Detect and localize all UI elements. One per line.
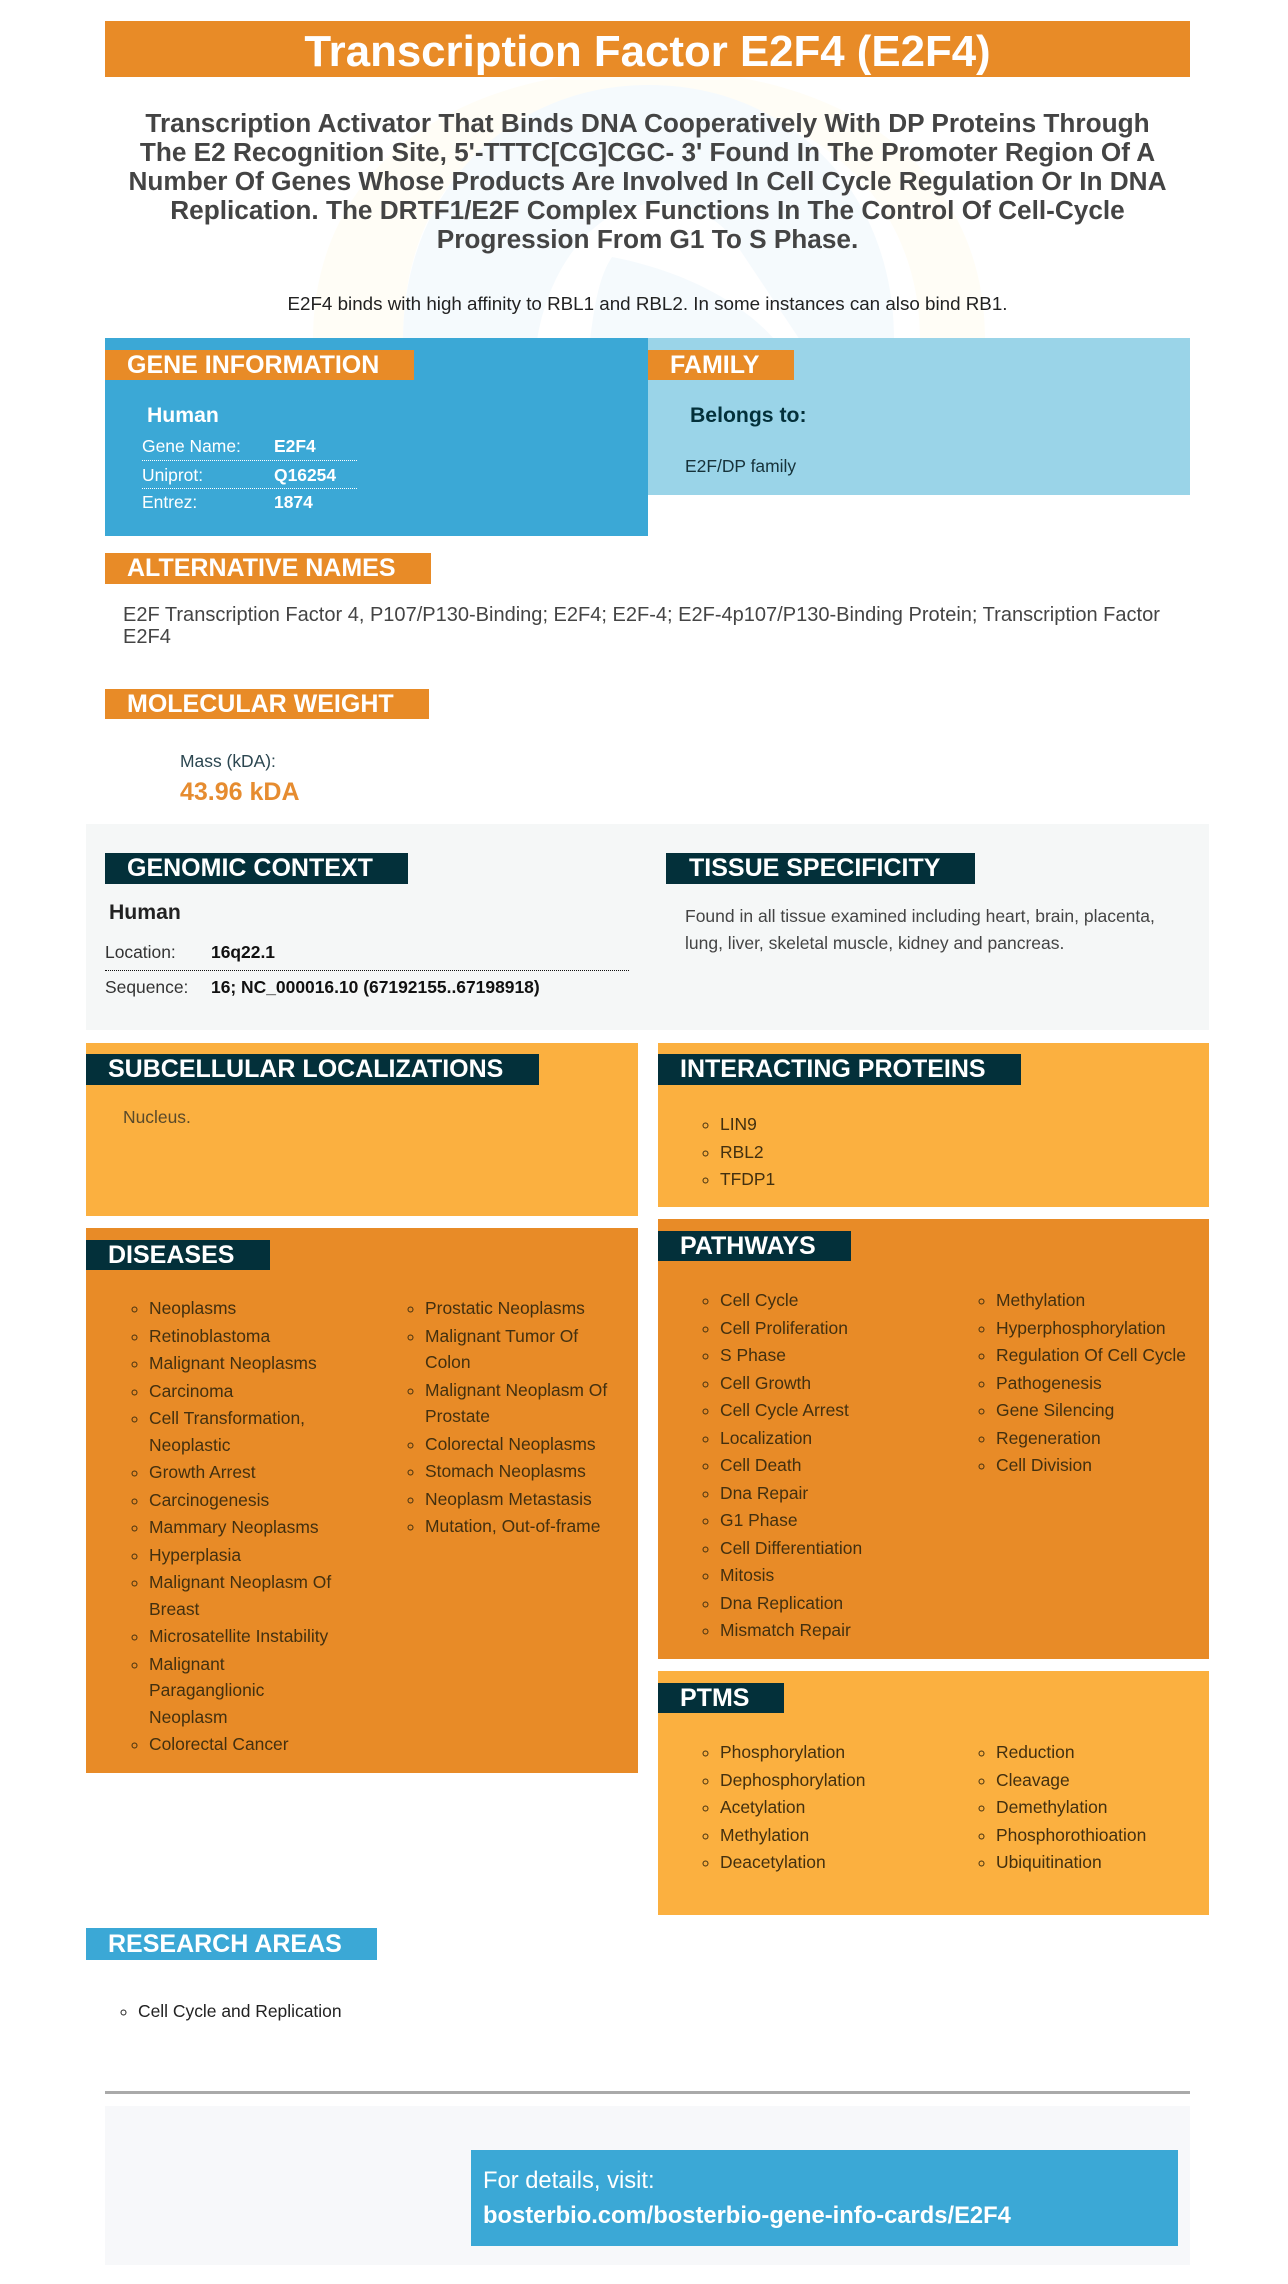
pathways list column 1: Cell Differentiation — [720, 1538, 862, 1558]
heading: diseases — [86, 1240, 270, 1270]
uniprot row — [142, 464, 357, 489]
tissue specificity text: lung, liver, skeletal muscle, kidney and pancreas. — [685, 933, 1064, 953]
species: human: Human — [109, 901, 181, 924]
panel: pathways — [658, 1219, 1209, 1659]
PTMs list column 1 — [702, 1742, 865, 1872]
pathways list column 1: Cell Growth — [720, 1372, 811, 1392]
pathways list column 2: Gene Silencing — [996, 1400, 1114, 1420]
pathways list column 1: Mitosis — [720, 1565, 774, 1585]
heading: family — [648, 350, 794, 380]
panel: gene information — [105, 338, 648, 536]
diseases list column 1: Malignant Neoplasms — [149, 1353, 317, 1373]
pathways list column 2: Regulation Of Cell Cycle — [996, 1345, 1186, 1365]
subtitle description: Replication. The DRTF1/E2F Complex Functions In The Control Of Cell-Cycle — [170, 195, 1125, 225]
diseases list column 2: Colorectal Neoplasms — [425, 1434, 596, 1454]
heading: research areas: RESEARCH AREAS — [108, 1930, 342, 1958]
diseases list column 2: Prostatic Neoplasms — [425, 1298, 585, 1318]
diseases list column 1: Colorectal Cancer — [149, 1734, 289, 1754]
PTMs list column 2 — [978, 1742, 1146, 1872]
callout: details link — [471, 2150, 1178, 2246]
heading: diseases: DISEASES — [108, 1240, 234, 1268]
interacting proteins list — [702, 1114, 775, 1189]
pathways list column 2: Pathogenesis — [996, 1372, 1102, 1392]
diseases list column 1: Cell Transformation, — [149, 1408, 305, 1428]
panel: genomic context and tissue specificity: 16; NC_000016.10 (67192155..67198918) — [211, 977, 540, 997]
pathways list column 1: Mismatch Repair — [720, 1620, 851, 1640]
tissue specificity text: Found in all tissue examined including heart, brain, placenta, — [685, 906, 1155, 926]
PTMs list column 2: Reduction — [996, 1742, 1075, 1762]
diseases list column 1 — [132, 1298, 332, 1754]
diseases list column 2: Stomach Neoplasms — [425, 1461, 586, 1481]
diseases list column 2: Neoplasm Metastasis — [425, 1488, 592, 1508]
entrez row — [142, 492, 313, 512]
panel: family — [648, 338, 1190, 495]
panel: interacting proteins — [658, 1043, 1209, 1207]
diseases list column 1: Malignant Neoplasm Of — [149, 1572, 331, 1592]
footer divider — [105, 2091, 1190, 2094]
pathways list column 1 — [702, 1290, 862, 1640]
family value: E2F/DP family — [685, 456, 796, 476]
belongs to label: Belongs to: — [690, 404, 807, 427]
heading: tissue specificity: TISSUE SPECIFICITY — [689, 854, 940, 882]
research areas list: Cell Cycle and Replication — [138, 2001, 342, 2021]
pathways list column 2: Hyperphosphorylation — [996, 1318, 1166, 1338]
diseases list column 2: Colon — [425, 1352, 471, 1372]
diseases list column 1: Growth Arrest — [149, 1462, 256, 1482]
PTMs list column 1: Phosphorylation — [720, 1742, 845, 1762]
pathways list column 1: Dna Replication — [720, 1592, 843, 1612]
location row — [105, 941, 629, 971]
diseases list column 1: Neoplastic — [149, 1434, 230, 1454]
location row: 16q22.1 — [211, 942, 275, 962]
diseases list column 1: Hyperplasia — [149, 1544, 241, 1564]
heading: interacting proteins: INTERACTING PROTEINS — [680, 1055, 986, 1083]
subtitle description — [128, 108, 1166, 254]
heading: genomic context: GENOMIC CONTEXT — [127, 854, 373, 882]
heading: PTMs — [658, 1683, 784, 1713]
diseases list column 1: Neoplasm — [149, 1706, 228, 1726]
subtitle description: Number Of Genes Whose Products Are Involved In Cell Cycle Regulation Or In DNA — [128, 166, 1166, 196]
species: human: Human — [147, 404, 219, 427]
PTMs list column 2: Cleavage — [996, 1770, 1070, 1790]
diseases list column 1: Mammary Neoplasms — [149, 1517, 319, 1537]
details url: bosterbio.com/bosterbio-gene-info-cards/E2F4 — [483, 2202, 1011, 2229]
diseases list column 2 — [408, 1298, 608, 1536]
diseases list column 2: Mutation, Out-of-frame — [425, 1516, 600, 1536]
subtitle description: The E2 Recognition Site, 5'-TTTC[CG]CGC- 3' Found In The Promoter Region Of A — [140, 137, 1155, 167]
panel: diseases — [86, 1228, 638, 1773]
sequence row — [105, 977, 540, 997]
diseases list column 1: Carcinogenesis — [149, 1490, 269, 1510]
details label: For details, visit: — [483, 2167, 655, 2194]
pathways list column 1: Localization — [720, 1428, 812, 1448]
heading: pathways: PATHWAYS — [680, 1232, 816, 1260]
diseases list column 2: Malignant Tumor Of — [425, 1326, 578, 1346]
diseases list column 1: Malignant — [149, 1654, 225, 1674]
interacting proteins list: LIN9 — [720, 1114, 757, 1134]
heading: subcellular localizations: SUBCELLULAR LOCALIZATIONS — [108, 1055, 503, 1083]
pathways list column 1: G1 Phase — [720, 1510, 798, 1530]
diseases list column 1: Breast — [149, 1598, 199, 1618]
diseases list column 2: Prostate — [425, 1406, 490, 1426]
diseases list column 1: Retinoblastoma — [149, 1326, 270, 1346]
diseases list column 1: Neoplasms — [149, 1298, 236, 1318]
alternative names text: E2F Transcription Factor 4, P107/P130-Binding; E2F4; E2F-4; E2F-4p107/P130-Binding Protein; Transcription Factor — [123, 604, 1160, 626]
panel: PTMs — [658, 1671, 1209, 1915]
alternative names text: E2F4 — [123, 626, 171, 648]
interacting proteins list: RBL2 — [720, 1142, 764, 1162]
panel: genomic context and tissue specificity — [86, 824, 1209, 1030]
diseases list column 1: Microsatellite Instability — [149, 1626, 328, 1646]
heading: family: FAMILY — [670, 350, 759, 378]
PTMs list column 1: Methylation — [720, 1824, 809, 1844]
pathways list column 1: Cell Proliferation — [720, 1318, 848, 1338]
uniprot row: Q16254 — [274, 465, 336, 485]
diseases list column 1: Paraganglionic — [149, 1680, 264, 1700]
sequence row: Sequence: — [105, 977, 188, 997]
heading: molecular weight: MOLECULAR WEIGHT — [127, 690, 394, 718]
PTMs list column 1: Deacetylation — [720, 1852, 826, 1872]
title: Transcription Factor E2F4 (E2F4) — [304, 27, 991, 76]
heading: pathways — [658, 1231, 851, 1261]
pathways list column 1: Cell Death — [720, 1455, 801, 1475]
location row: Location: — [105, 942, 176, 962]
gene name row: E2F4 — [274, 436, 316, 456]
interacting proteins list: TFDP1 — [720, 1169, 775, 1189]
PTMs list column 1: Acetylation — [720, 1797, 805, 1817]
pathways list column 2: Cell Division — [996, 1455, 1092, 1475]
binding summary text: E2F4 binds with high affinity to RBL1 and RBL2. In some instances can also bind RB1. — [287, 293, 1008, 314]
heading: gene information: GENE INFORMATION — [127, 350, 379, 378]
pathways list column 1: Cell Cycle Arrest — [720, 1400, 849, 1420]
mass value: 43.96 kDA — [180, 778, 300, 806]
heading: PTMs: PTMS — [680, 1684, 749, 1712]
pathways list column 1: Cell Cycle — [720, 1290, 798, 1310]
diseases list column 1: Carcinoma — [149, 1380, 233, 1400]
entrez row: 1874 — [274, 492, 313, 512]
diseases list column 2: Malignant Neoplasm Of — [425, 1380, 607, 1400]
heading: alternative names: ALTERNATIVE NAMES — [127, 554, 396, 582]
pathways list column 1: S Phase — [720, 1345, 786, 1365]
mass label: Mass (kDA): — [180, 751, 276, 771]
panel: subcellular localizations — [86, 1043, 638, 1216]
title — [105, 21, 1190, 77]
background logo watermark — [313, 77, 985, 338]
uniprot row: Uniprot: — [142, 465, 203, 485]
alternative names text — [123, 604, 1160, 648]
pathways list column 2: Methylation — [996, 1290, 1085, 1310]
gene name row: Gene Name: — [142, 436, 241, 456]
PTMs list column 2: Demethylation — [996, 1797, 1107, 1817]
pathways list column 2: Regeneration — [996, 1428, 1101, 1448]
PTMs list column 2: Phosphorothioation — [996, 1824, 1146, 1844]
PTMs list column 1: Dephosphorylation — [720, 1770, 865, 1790]
panel: footer — [105, 2106, 1190, 2265]
PTMs list column 2: Ubiquitination — [996, 1852, 1102, 1872]
pathways list column 2 — [978, 1290, 1186, 1475]
tissue specificity text — [685, 906, 1155, 953]
entrez row: Entrez: — [142, 492, 197, 512]
gene name row — [142, 435, 357, 461]
subtitle description: Transcription Activator That Binds DNA Cooperatively With DP Proteins Through — [145, 108, 1150, 138]
localization text: Nucleus. — [123, 1107, 191, 1127]
pathways list column 1: Dna Repair — [720, 1482, 808, 1502]
subtitle description: Progression From G1 To S Phase. — [437, 224, 858, 254]
